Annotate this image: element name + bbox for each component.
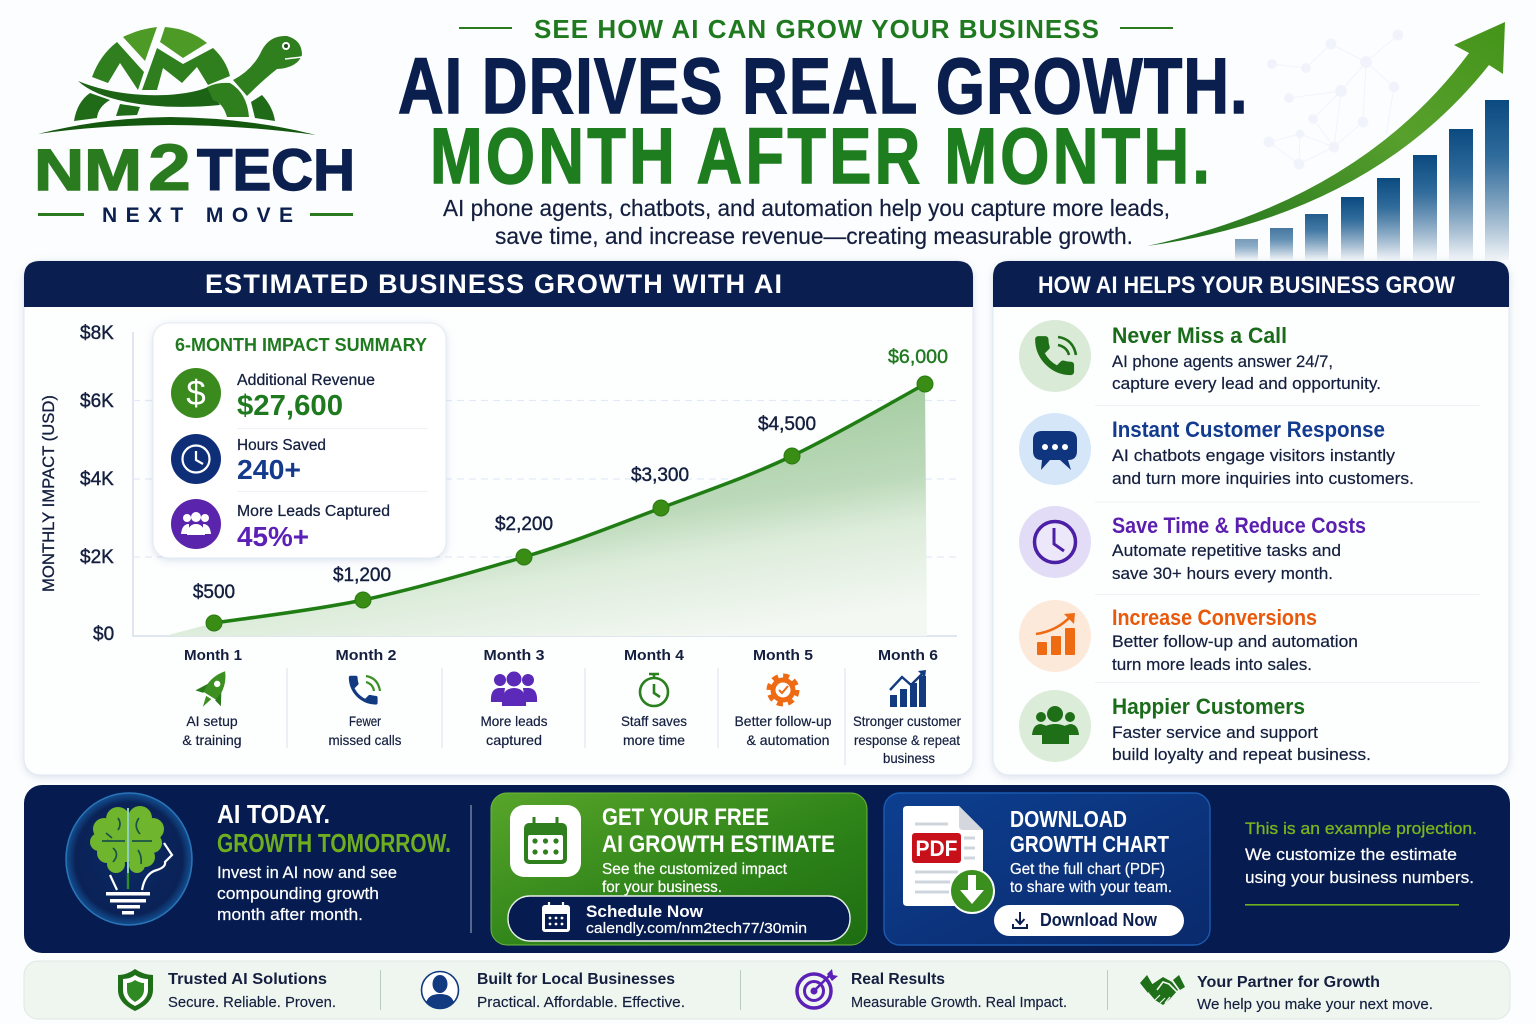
y axis labels: $4K — [80, 469, 114, 490]
icon: PDF document: PDF — [916, 836, 958, 861]
icon: people — [491, 672, 537, 706]
month 4: more time — [623, 732, 685, 748]
month 4: Month 4 — [624, 647, 685, 664]
trust item: your partner for growth: Your Partner for Growth — [1197, 974, 1380, 991]
icon: chat bubble — [1019, 413, 1091, 485]
icon: calendar — [510, 805, 581, 877]
month 3: Month 3 — [484, 647, 544, 664]
summary heading: 6-MONTH IMPACT SUMMARY — [175, 335, 427, 355]
benefit: never miss a call: capture every lead and opportunity. — [1112, 374, 1381, 393]
benefit: save time and reduce costs: save 30+ hours every month. — [1112, 564, 1333, 583]
main headline: AI DRIVES REAL GROWTH. — [398, 42, 1248, 131]
trust item: real results — [797, 969, 1067, 1011]
button: download now — [994, 905, 1184, 936]
month dividers — [287, 668, 845, 765]
note: example projection: using your business numbers. — [1245, 868, 1474, 887]
card: 6-month impact summary — [153, 323, 446, 558]
icon: target — [797, 969, 838, 1008]
card: free AI growth estimate — [491, 793, 867, 945]
text block: AI today — [217, 799, 451, 924]
wordmark — [34, 130, 355, 204]
data labels: $500 — [193, 582, 235, 603]
card: download growth chart: GROWTH CHART — [1010, 831, 1169, 857]
benefit: happier customers: Faster service and support — [1112, 723, 1318, 742]
card: free AI growth estimate: AI GROWTH ESTIMATE — [602, 831, 835, 858]
icon: customers — [1019, 690, 1091, 762]
icon: person — [422, 972, 458, 1008]
y axis labels: $8K — [80, 323, 114, 344]
button: schedule now: calendly.com/nm2tech77/30min — [586, 920, 807, 937]
main headline — [398, 42, 1248, 201]
month 6: Stronger customer — [853, 713, 961, 729]
month 4 — [621, 647, 687, 748]
benefit: happier customers: Happier Customers — [1112, 694, 1305, 719]
y axis labels: $2K — [80, 547, 114, 568]
panel heading: HOW AI HELPS YOUR BUSINESS GROW — [1038, 272, 1456, 299]
panel: how AI helps your business grow — [993, 261, 1509, 775]
trust strip — [24, 961, 1510, 1019]
wordmark: NM — [34, 138, 142, 203]
data labels: $1,200 — [333, 565, 391, 586]
benefit: instant customer response: Instant Customer Response — [1112, 417, 1385, 442]
panel heading — [24, 261, 973, 307]
trust item: trusted AI solutions: Secure. Reliable. Proven. — [168, 994, 336, 1011]
data labels: $4,500 — [758, 414, 816, 435]
header subtitle: save time, and increase revenue—creating measurable growth. — [495, 223, 1133, 249]
month 1: & training — [182, 732, 242, 748]
data labels — [193, 347, 948, 603]
benefit: save time and reduce costs — [1019, 506, 1366, 583]
tagline — [38, 204, 353, 227]
icon: phone — [1019, 320, 1091, 392]
trust item: trusted AI solutions: Trusted AI Solutions — [168, 971, 327, 988]
text block: AI today: Invest in AI now and see — [217, 863, 397, 882]
wordmark: 2 — [148, 130, 191, 204]
card: free AI growth estimate: for your business. — [602, 879, 722, 896]
note: example projection — [1245, 819, 1477, 906]
metric: more leads captured — [171, 499, 390, 552]
metric: hours saved: Hours Saved — [237, 437, 326, 454]
card: download growth chart: Get the full chart (PDF) — [1010, 861, 1165, 878]
trust item: trusted AI solutions — [118, 969, 336, 1011]
month 2: missed calls — [328, 732, 402, 748]
icon: rocket — [190, 663, 238, 715]
data labels: $2,200 — [495, 514, 553, 535]
month 5: Month 5 — [753, 647, 813, 664]
button: download now: Download Now — [1040, 910, 1158, 930]
faint network graphic — [1264, 30, 1403, 169]
icon: stopwatch — [640, 674, 668, 706]
benefit: happier customers — [1019, 690, 1371, 764]
logo: NM2Tech turtle and wordmark — [34, 27, 355, 227]
benefit: happier customers: build loyalty and repeat business. — [1112, 745, 1371, 764]
note: example projection: We customize the estimate — [1245, 845, 1457, 864]
benefit: instant customer response: and turn more inquiries into customers. — [1112, 469, 1414, 488]
trust item: real results: Real Results — [851, 971, 945, 988]
text block: AI today: GROWTH TOMORROW. — [217, 828, 451, 858]
icon: shield — [118, 969, 153, 1011]
month 3 — [480, 647, 548, 748]
wordmark: TECH — [197, 138, 355, 203]
panel heading — [993, 261, 1509, 307]
trust item: your partner for growth: We help you make your next move. — [1197, 996, 1433, 1013]
month 1: AI setup — [186, 713, 238, 729]
month 6: business — [883, 750, 935, 766]
icon: gear — [769, 676, 797, 704]
metric: hours saved — [171, 434, 326, 485]
trust item: built for local businesses: Built for Local Businesses — [477, 971, 675, 988]
icon: growth chart — [890, 670, 926, 707]
text block: AI today: AI TODAY. — [217, 799, 330, 829]
card: download growth chart: to share with your team. — [1010, 879, 1172, 896]
benefit: increase conversions: turn more leads into sales. — [1112, 655, 1312, 674]
month 5: & automation — [746, 732, 830, 748]
benefit: save time and reduce costs: Automate repetitive tasks and — [1112, 541, 1341, 560]
icon: rising bars — [1019, 600, 1091, 672]
data labels: $6,000 — [888, 347, 948, 368]
tagline: NEXT MOVE — [102, 204, 293, 227]
panel heading: ESTIMATED BUSINESS GROWTH WITH AI — [205, 269, 782, 299]
benefit: increase conversions — [1019, 600, 1358, 674]
icon: brain light bulb — [66, 793, 192, 925]
month 2: Fewer — [349, 713, 381, 729]
header subtitle: AI phone agents, chatbots, and automation help you capture more leads, — [443, 195, 1170, 221]
month 1 — [182, 647, 242, 748]
month 4: Staff saves — [621, 713, 687, 729]
month 6: response & repeat — [854, 732, 960, 748]
y axis labels: $6K — [80, 391, 114, 412]
card: download growth chart: DOWNLOAD — [1010, 806, 1127, 832]
y axis labels: $0 — [93, 624, 114, 645]
benefit: never miss a call — [1019, 320, 1381, 393]
month 6 — [853, 647, 961, 766]
header eyebrow: SEE HOW AI CAN GROW YOUR BUSINESS — [534, 14, 1099, 44]
month 3: More leads — [480, 713, 548, 729]
line chart: monthly impact — [165, 376, 933, 636]
trust item: built for local businesses: Practical. Affordable. Effective. — [477, 994, 685, 1011]
panel: call-to-action band — [24, 785, 1510, 953]
benefit: instant customer response — [1019, 413, 1414, 488]
button: schedule now — [508, 896, 850, 941]
header growth bars — [1235, 100, 1509, 260]
metric: additional revenue: Additional Revenue — [237, 372, 375, 389]
metric: hours saved: 240+ — [237, 454, 301, 485]
month 5: Better follow-up — [734, 713, 832, 729]
y axis labels — [80, 323, 114, 645]
benefit: never miss a call: AI phone agents answer 24/7, — [1112, 352, 1333, 371]
metric: additional revenue: $ — [186, 374, 206, 413]
month 2 — [328, 647, 402, 748]
trust item: built for local businesses — [422, 971, 685, 1011]
month 2: Month 2 — [336, 647, 396, 664]
trust item: your partner for growth — [1140, 974, 1433, 1013]
month 5 — [734, 647, 832, 748]
arrow: growth — [1147, 22, 1505, 246]
benefit: increase conversions: Increase Conversions — [1112, 605, 1317, 630]
benefit: never miss a call: Never Miss a Call — [1112, 323, 1287, 348]
data labels: $3,300 — [631, 465, 689, 486]
button: schedule now: Schedule Now — [586, 902, 704, 921]
metric: additional revenue — [171, 368, 375, 422]
icon: clock — [1019, 506, 1091, 578]
icon: phone — [349, 676, 380, 705]
metric: additional revenue: $27,600 — [237, 390, 343, 422]
icon: PDF document — [903, 806, 994, 913]
note: example projection: This is an example projection. — [1245, 819, 1477, 838]
header subtitle — [443, 195, 1170, 249]
card: free AI growth estimate: See the customized impact — [602, 861, 788, 878]
benefit: increase conversions: Better follow-up and automation — [1112, 632, 1358, 651]
month 6: Month 6 — [878, 647, 938, 664]
month 1: Month 1 — [184, 647, 242, 664]
text block: AI today: compounding growth — [217, 884, 379, 903]
trust item: real results: Measurable Growth. Real Impact. — [851, 994, 1067, 1011]
icon: handshake — [1140, 975, 1185, 1005]
card: free AI growth estimate: GET YOUR FREE — [602, 804, 769, 831]
month 3: captured — [486, 732, 542, 748]
y axis title: MONTHLY IMPACT (USD) — [40, 395, 58, 592]
panel: estimated business growth chart — [24, 261, 973, 775]
icon: turtle — [38, 27, 316, 135]
text block: AI today: month after month. — [217, 905, 363, 924]
benefit: save time and reduce costs: Save Time & Reduce Costs — [1112, 513, 1366, 538]
benefit: instant customer response: AI chatbots engage visitors instantly — [1112, 446, 1396, 465]
card: download growth chart — [884, 793, 1210, 945]
metric: more leads captured: 45%+ — [237, 521, 309, 552]
metric: more leads captured: More Leads Captured — [237, 503, 390, 520]
main headline: MONTH AFTER MONTH. — [430, 112, 1210, 201]
